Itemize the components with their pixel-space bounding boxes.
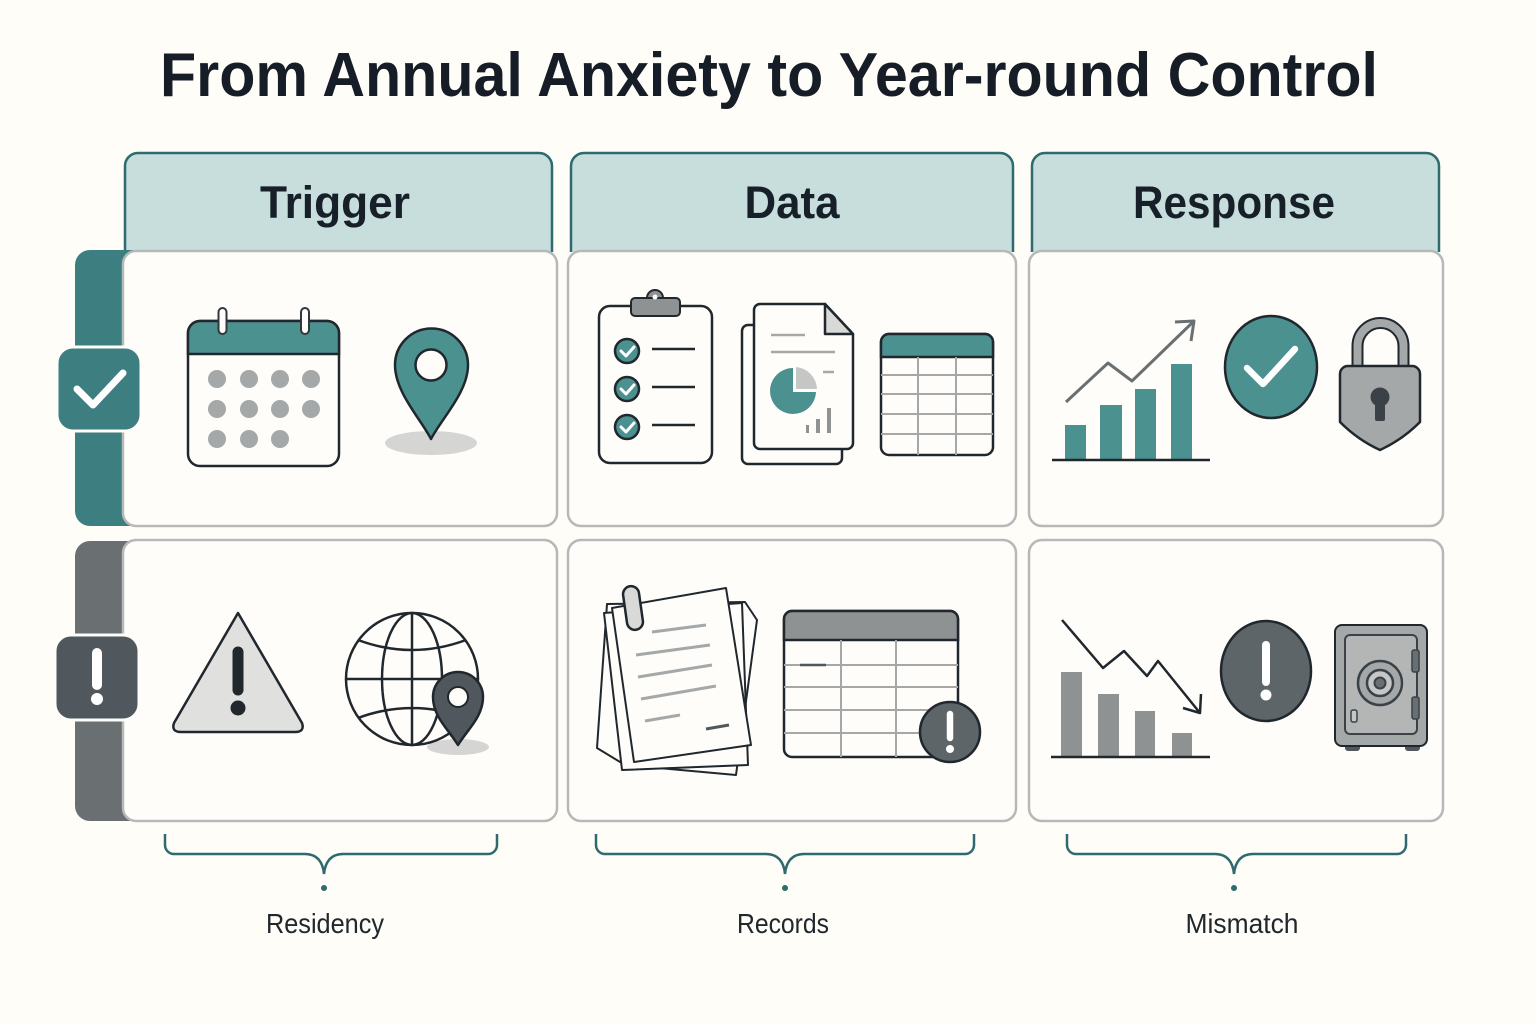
icon: checklist clipboard xyxy=(599,290,712,463)
label: mismatch: Mismatch xyxy=(1186,908,1298,939)
row bar: positive xyxy=(75,250,135,526)
column header: Data xyxy=(571,153,1013,252)
panel: trigger positive xyxy=(123,251,557,526)
label: residency: Residency xyxy=(266,908,384,939)
icon: report document xyxy=(742,304,853,464)
icon: alert circle xyxy=(1221,621,1311,721)
row bar: warning xyxy=(75,541,135,821)
icon: safe xyxy=(1335,625,1427,751)
icon: globe with pin xyxy=(346,613,489,755)
column header: Trigger xyxy=(125,153,552,252)
icon: check circle xyxy=(1225,316,1317,418)
icon: falling bar chart xyxy=(1051,620,1210,757)
icon: messy paper stack xyxy=(597,585,757,775)
column header: Trigger: Trigger xyxy=(260,177,410,228)
icon: rising bar chart xyxy=(1052,321,1210,460)
panel: response positive xyxy=(1029,251,1443,526)
title: From Annual Anxiety to Year-round Control xyxy=(160,41,1378,110)
icon: location pin xyxy=(385,328,477,455)
icon: padlock xyxy=(1340,323,1420,450)
icon: spreadsheet with alert xyxy=(784,611,980,762)
panel: response warning xyxy=(1029,540,1443,821)
panel: data positive xyxy=(568,251,1016,526)
column header: Response: Response xyxy=(1133,177,1335,228)
icon: calendar xyxy=(188,308,339,466)
icon: data table xyxy=(881,334,993,455)
column header: Response xyxy=(1032,153,1439,252)
icon: check badge xyxy=(57,347,141,431)
bracket: records xyxy=(596,834,974,891)
label: records: Records xyxy=(737,908,829,939)
icon: warning triangle xyxy=(173,613,303,732)
icon: warning badge xyxy=(55,635,139,720)
bracket: residency xyxy=(165,834,497,891)
panel: data warning xyxy=(568,540,1016,821)
panel: trigger warning xyxy=(123,540,557,821)
column header: Data: Data xyxy=(744,177,840,228)
bracket: mismatch xyxy=(1067,834,1406,891)
